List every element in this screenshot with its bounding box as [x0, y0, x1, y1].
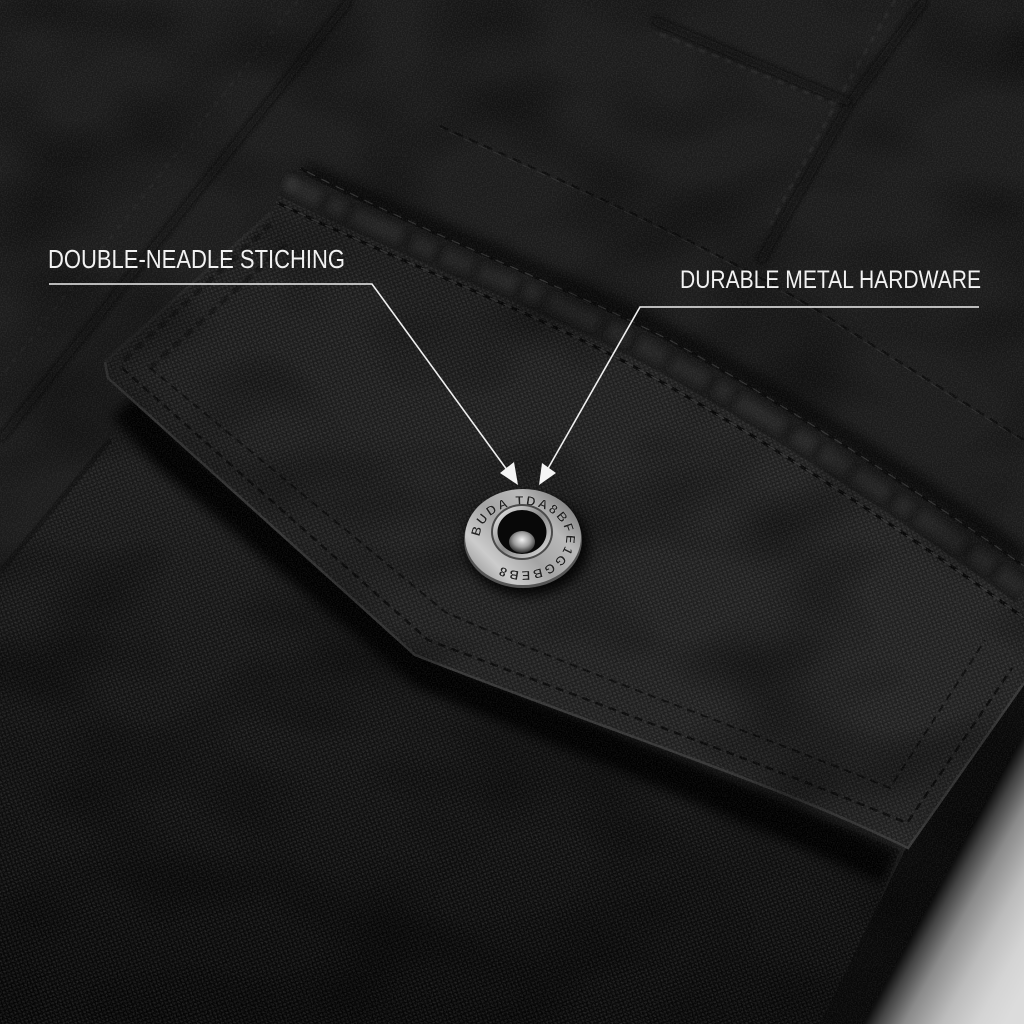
arrowhead left — [500, 462, 518, 485]
callout: durable metal hardware — [539, 266, 981, 485]
ribbed welt seam — [278, 168, 1024, 618]
white backdrop at lower right — [863, 735, 1024, 1024]
flap inner stitching — [150, 368, 985, 788]
shadow cast by flap — [125, 405, 890, 868]
snap button hardware — [460, 489, 593, 602]
right side shadow of pocket — [820, 680, 1024, 1024]
button rim lettering: BUDA TDA8BFE1GGBEB8 — [471, 496, 576, 580]
callout: double-needle stitching: DOUBLE-NEADLE STICHING — [48, 244, 345, 274]
pocket flap — [105, 182, 1024, 848]
button centre eyelet — [491, 504, 553, 560]
flap left stitching, out of focus — [124, 225, 285, 368]
flap outer stitching — [122, 368, 1012, 823]
arrowhead right — [539, 463, 556, 485]
pocket body lower fabric — [0, 425, 900, 1024]
callout: double-needle stitching — [48, 244, 518, 485]
flap edge highlight — [105, 362, 1024, 848]
